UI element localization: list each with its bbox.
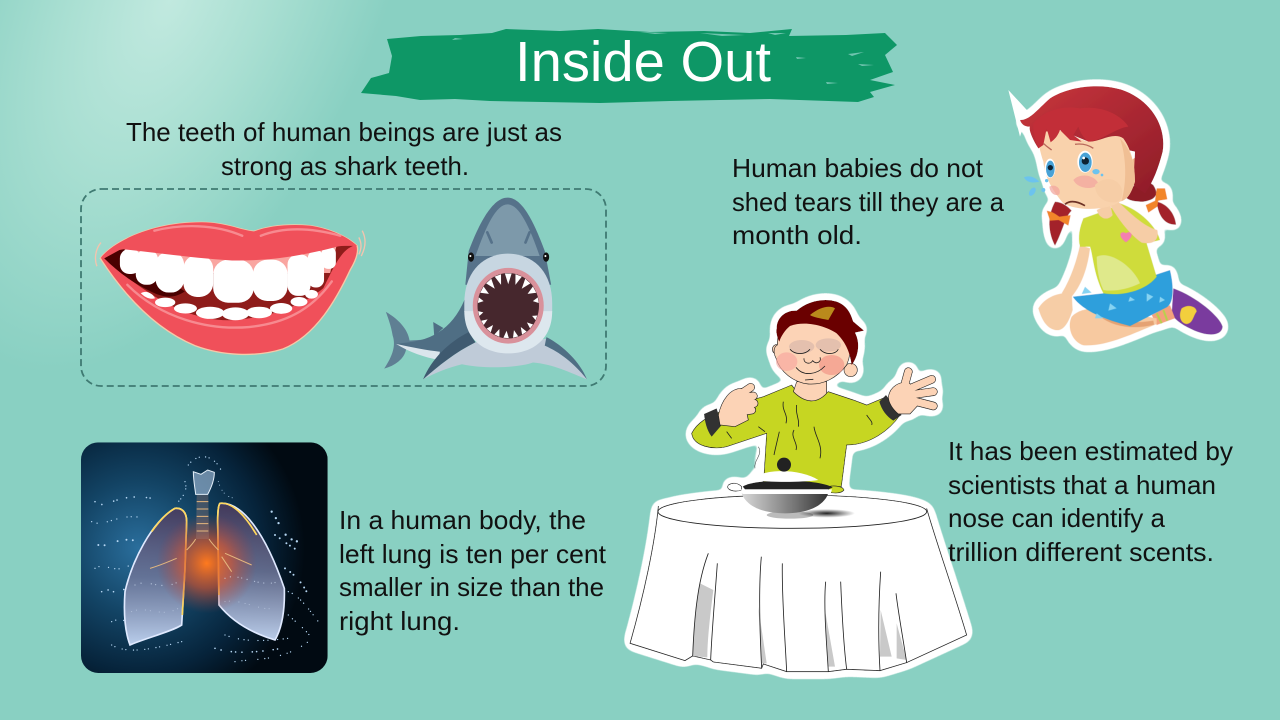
text: teeth fact: strong as shark teeth. <box>221 151 469 181</box>
head <box>772 300 864 384</box>
brush stroke <box>361 29 897 103</box>
text: scents fact: It has been estimated by <box>948 436 1233 466</box>
skirt <box>1073 270 1173 326</box>
trachea <box>193 470 214 494</box>
text: lung fact: left lung is ten per cent <box>339 539 607 569</box>
shirt <box>1079 203 1160 294</box>
text: lung fact: In a human body, the <box>339 505 586 535</box>
text: scents fact <box>948 436 1233 567</box>
cuffs <box>704 395 902 437</box>
illustration: boy smelling soup at table <box>630 300 967 672</box>
legs <box>1070 309 1157 345</box>
hands <box>718 372 933 427</box>
text: tears fact: Human babies do not <box>732 153 984 183</box>
text: lung fact: smaller in size than the <box>339 572 604 602</box>
left lung <box>124 508 187 645</box>
neck <box>793 382 827 401</box>
particles over lungs <box>132 577 278 612</box>
shoe <box>1172 288 1223 335</box>
image: glowing lungs <box>81 442 328 673</box>
tears <box>1024 169 1103 197</box>
title: Inside Out <box>515 30 771 94</box>
text: scents fact: scientists that a human <box>948 470 1216 500</box>
sock <box>1152 305 1175 325</box>
head <box>1020 86 1163 209</box>
sweater <box>692 385 900 487</box>
text: tears fact: month old. <box>732 220 862 250</box>
soup bowl <box>728 447 855 519</box>
scattered particles <box>92 457 318 662</box>
title banner <box>361 29 897 103</box>
text: tears fact <box>732 153 1005 250</box>
text: teeth fact <box>126 117 562 181</box>
icon: smiling mouth <box>95 222 365 354</box>
text: teeth fact: The teeth of human beings are just as <box>126 117 562 147</box>
right arm <box>1110 198 1158 243</box>
right lung <box>218 503 284 640</box>
text: scents fact: nose can identify a <box>948 503 1166 533</box>
dashed panel: teeth comparison <box>81 189 606 386</box>
text: lung fact <box>339 505 607 636</box>
text: scents fact: trillion different scents. <box>948 537 1214 567</box>
tablecloth <box>630 495 967 672</box>
neck <box>1097 203 1113 219</box>
braids and bows <box>1125 182 1156 202</box>
illustration: crying girl <box>1008 86 1223 345</box>
text: tears fact: shed tears till they are a <box>732 187 1005 217</box>
left arm and hand <box>1062 245 1090 297</box>
text: lung fact: right lung. <box>339 606 460 636</box>
icon: shark <box>384 198 587 379</box>
